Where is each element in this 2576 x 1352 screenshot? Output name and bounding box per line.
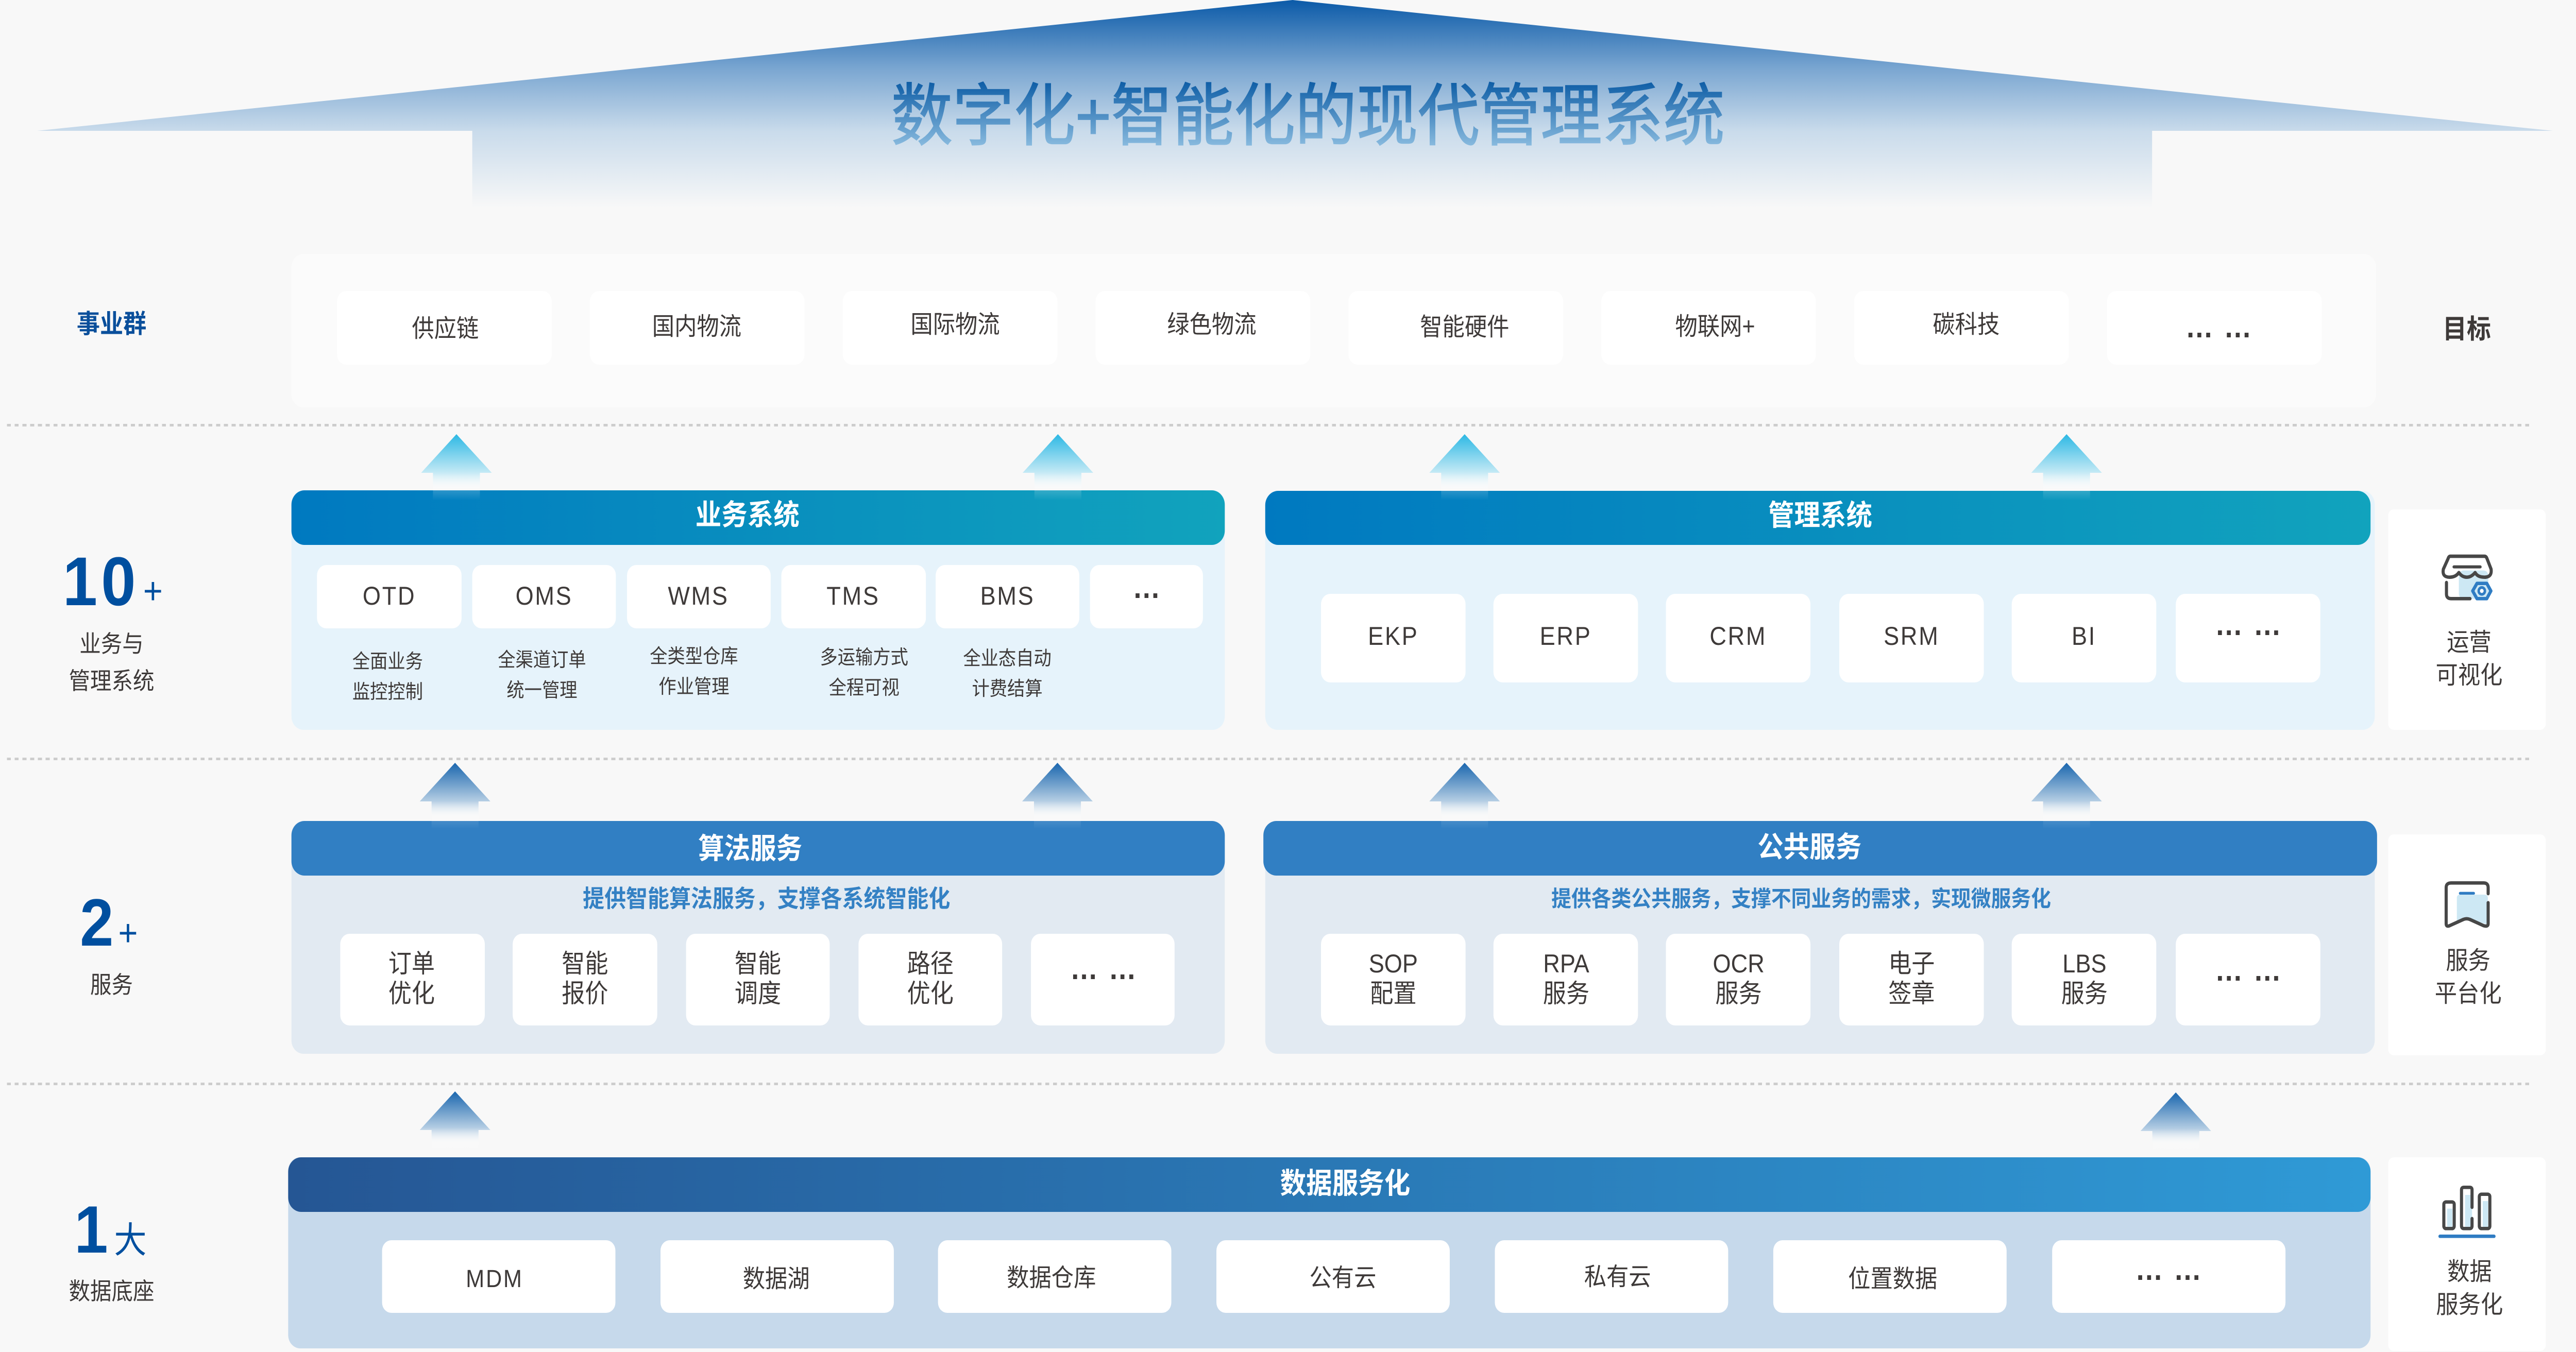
chip: SRM: SRM (1884, 622, 1939, 651)
chip: 国内物流: 国内物流 (652, 313, 741, 340)
chip: 公有云: 公有云 (1309, 1264, 1376, 1292)
panel: 管理系统 (1265, 491, 2375, 730)
arrow: middle row 2 (1022, 763, 1093, 825)
text: 服务平台化 (2421, 945, 2515, 1011)
chip: 智能调度: 智能 (735, 949, 781, 978)
chip: 订单优化: 订单 (388, 949, 435, 978)
chip: LBS服务: 服务 (2061, 979, 2108, 1008)
chip: 智能报价: 报价 (562, 979, 608, 1008)
chip: ERP (1494, 594, 1638, 682)
description: OTD (352, 651, 423, 703)
chip: 智能调度 (686, 934, 829, 1025)
chip: OTD (317, 565, 462, 628)
text: 运营可视化: 可视化 (2436, 662, 2502, 689)
chip: 数据湖 (660, 1240, 894, 1313)
text: 数据服务化: 数据 (2447, 1258, 2492, 1286)
chip: 智能调度: 调度 (735, 979, 781, 1008)
chip: 供应链: 供应链 (412, 315, 479, 342)
chip: OCR服务: OCR (1713, 949, 1765, 978)
row label: 目标: 目标 (2443, 315, 2491, 345)
icon: bookmark (2444, 881, 2490, 929)
card: 服务平台化 (2388, 834, 2546, 1055)
chip: 私有云: 私有云 (1584, 1263, 1651, 1291)
chip: more (2176, 934, 2320, 1025)
chip: RPA服务: 服务 (1543, 979, 1589, 1008)
chip: WMS: WMS (668, 581, 729, 610)
description: BMS (963, 648, 1052, 700)
chip: 智能报价 (513, 934, 657, 1025)
chip: SOP配置 (1321, 934, 1466, 1025)
chip: 路径优化: 优化 (907, 979, 954, 1008)
chip: more: … … (2215, 607, 2281, 642)
header: 管理系统: 管理系统 (1768, 499, 1872, 532)
chip: 物联网+ (1601, 291, 1816, 365)
card: 运营可视化 (2388, 509, 2546, 730)
chip: more (2107, 291, 2321, 365)
panel: 算法服务 (292, 821, 1225, 1054)
chip: 国际物流 (843, 291, 1058, 365)
chip: OCR服务: 服务 (1716, 979, 1762, 1008)
left text: 业务与管理系统: 管理系统 (69, 668, 155, 694)
chip: BI: BI (2072, 622, 2096, 651)
description: TMS: 全程可视 (829, 677, 900, 699)
left label: 2+: 2+ (80, 885, 138, 960)
description: BMS: 全业态自动 (963, 648, 1052, 670)
text: 运营可视化 (2422, 626, 2516, 692)
header: 公共服务 (1263, 821, 2377, 876)
chip: more (1090, 565, 1203, 628)
chip: 位置数据: 位置数据 (1848, 1265, 1937, 1293)
chip: 路径优化 (858, 934, 1002, 1025)
chip: more: … (1132, 570, 1160, 605)
chip: 智能硬件 (1348, 291, 1563, 365)
icon: storefront with eye (2441, 554, 2494, 601)
chip: 物联网+: 物联网+ (1675, 313, 1755, 340)
row label: 事业群: 事业群 (77, 310, 146, 338)
panel: business groups (292, 254, 2376, 407)
arrow: top row 3 (1429, 434, 1500, 498)
left text: 业务与管理系统: 业务与 (79, 630, 144, 657)
header: 业务系统: 业务系统 (696, 499, 800, 531)
chip: more (1031, 934, 1175, 1025)
chip: SRM (1839, 594, 1984, 682)
header: 数据服务化: 数据服务化 (1280, 1167, 1410, 1200)
description: OTD: 监控控制 (352, 681, 423, 703)
left label: 1大: 1大 (74, 1192, 146, 1267)
chip: more: … … (1070, 951, 1137, 986)
chip: ERP: ERP (1540, 622, 1592, 651)
description: TMS (820, 647, 908, 699)
header: 管理系统 (1265, 491, 2370, 545)
description: WMS: 全类型仓库 (650, 646, 738, 668)
chip: LBS服务 (2012, 934, 2156, 1025)
chip: TMS (782, 565, 926, 628)
description: OMS: 全渠道订单 (498, 649, 586, 671)
chip: CRM (1666, 594, 1810, 682)
text: 服务平台化: 服务 (2446, 947, 2490, 974)
roof banner with title: 数字化+智能化的现代管理系统 (891, 78, 1725, 154)
subtitle: 算法服务: 提供智能算法服务，支撑各系统智能化 (583, 885, 950, 912)
arrow: lower row left (420, 1091, 490, 1138)
text: 服务平台化: 平台化 (2435, 980, 2502, 1007)
panel: 公共服务 (1265, 821, 2375, 1054)
chip: 订单优化 (340, 934, 485, 1025)
chip: 绿色物流: 绿色物流 (1167, 311, 1257, 338)
chip: 电子签章: 签章 (1888, 979, 1935, 1008)
chip: MDM (382, 1240, 616, 1313)
chip: 绿色物流 (1095, 291, 1310, 365)
chip: TMS: TMS (826, 581, 880, 610)
header: 算法服务: 算法服务 (698, 832, 802, 865)
chip: EKP (1321, 594, 1466, 682)
chip: MDM: MDM (466, 1265, 523, 1293)
chip: 电子签章: 电子 (1888, 949, 1935, 978)
arrow: lower row right (2140, 1092, 2211, 1139)
chip: SOP配置: 配置 (1370, 979, 1416, 1008)
chip: more: … … (2215, 953, 2281, 987)
arrow: top row 1 (421, 434, 492, 498)
chip: 私有云 (1495, 1240, 1728, 1313)
arrow: top row 4 (2031, 434, 2102, 498)
roof banner with title (38, 0, 2552, 195)
chip: more (2176, 594, 2320, 682)
card: 数据服务化 (2388, 1157, 2546, 1351)
chip: LBS服务: LBS (2062, 949, 2107, 978)
chip: OMS (472, 565, 616, 628)
description: WMS: 作业管理 (658, 676, 730, 698)
header: 公共服务: 公共服务 (1757, 831, 1861, 863)
chip: RPA服务 (1494, 934, 1638, 1025)
left text: 业务与管理系统 (69, 630, 155, 694)
header: 数据服务化 (288, 1157, 2370, 1212)
chip: RPA服务: RPA (1543, 949, 1589, 978)
chip: 数据湖: 数据湖 (743, 1265, 810, 1293)
chip: more (2052, 1240, 2285, 1313)
chip: BMS: BMS (980, 581, 1035, 610)
description: BMS: 计费结算 (972, 678, 1043, 700)
left text: 数据底座: 数据底座 (69, 1278, 155, 1305)
chip: BMS (936, 565, 1079, 628)
chip: OMS: OMS (516, 581, 572, 610)
chip: CRM: CRM (1709, 622, 1767, 651)
chip: 智能硬件: 智能硬件 (1420, 313, 1509, 341)
header: 算法服务 (292, 821, 1225, 876)
chip: 供应链 (337, 291, 552, 365)
arrow: middle row 4 (2031, 763, 2102, 825)
chip: 订单优化: 优化 (388, 979, 435, 1008)
arrow: top row 2 (1023, 434, 1093, 498)
arrow: middle row 3 (1429, 763, 1500, 825)
header: 业务系统 (292, 490, 1225, 545)
chip: SOP配置: SOP (1369, 949, 1418, 978)
chip: 国际物流: 国际物流 (910, 311, 1000, 338)
chip: 智能报价: 智能 (562, 949, 608, 978)
description: OTD: 全面业务 (352, 651, 423, 673)
description: TMS: 多运输方式 (820, 647, 908, 669)
description: WMS (650, 646, 738, 698)
chip: 公有云 (1216, 1240, 1450, 1313)
chip: 数据仓库: 数据仓库 (1007, 1264, 1096, 1292)
chip: EKP: EKP (1368, 622, 1419, 651)
panel: 数据服务化 (288, 1157, 2370, 1348)
chip: more: … … (2185, 309, 2252, 344)
description: OMS: 统一管理 (506, 680, 578, 701)
left text: 服务: 服务 (90, 971, 133, 998)
chip: OCR服务 (1666, 934, 1810, 1025)
chip: more: … … (2135, 1252, 2201, 1287)
left label: 10+: 10+ (63, 543, 163, 620)
text: 运营可视化: 运营 (2447, 629, 2492, 656)
chip: 国内物流 (590, 291, 805, 365)
chip: 碳科技: 碳科技 (1933, 311, 1999, 338)
chip: 位置数据 (1773, 1240, 2007, 1313)
chip: BI (2012, 594, 2156, 682)
chip: 电子签章 (1839, 934, 1984, 1025)
description: OMS (498, 649, 586, 701)
chip: 路径优化: 路径 (907, 949, 954, 978)
chip: 数据仓库 (938, 1240, 1172, 1313)
chip: OTD: OTD (363, 581, 416, 610)
chip: 碳科技 (1854, 291, 2069, 365)
arrow: middle row 1 (419, 763, 490, 825)
panel: 业务系统 (292, 490, 1225, 730)
text: 数据服务化: 服务化 (2436, 1291, 2503, 1319)
chip: WMS (627, 565, 771, 628)
subtitle: 公共服务: 提供各类公共服务，支撑不同业务的需求，实现微服务化 (1551, 887, 2051, 912)
icon: bar chart (2438, 1185, 2496, 1239)
text: 数据服务化 (2423, 1256, 2516, 1322)
